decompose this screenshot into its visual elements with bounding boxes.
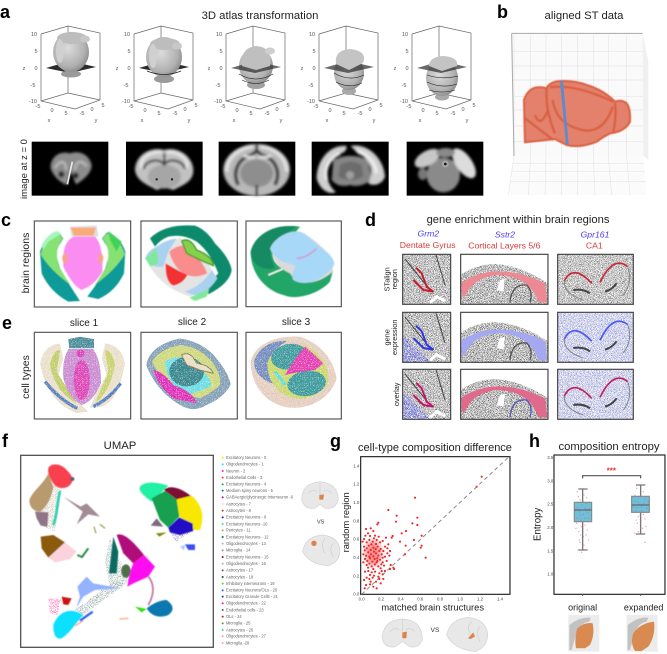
panel letter h: h: [529, 431, 540, 451]
vs label: VS: [431, 627, 440, 634]
UMAP clusters: [29, 464, 202, 639]
3D plot 2: x: [141, 118, 144, 124]
d tile: Dentate Gyrus STalign: [403, 254, 451, 304]
3D plot 5: y: [466, 118, 469, 124]
x tick labels: 0.2: [378, 596, 385, 601]
axis label: cell types: cell types: [20, 355, 32, 399]
vs label: VS: [317, 520, 325, 526]
MRI slice 5: [407, 142, 483, 196]
panel d: gene enrichment: [382, 229, 633, 419]
3D plot 1: z: [23, 66, 26, 72]
scatter points: [363, 477, 482, 588]
3D plot 1: 5: [101, 103, 105, 109]
3D plot 5: z: [394, 66, 397, 72]
3D plot 2: 10: [124, 32, 130, 38]
gene header Sstr2: Cortical Layers 5/6: [468, 241, 541, 251]
3D plot 4: y: [373, 118, 376, 124]
3D plot 3: -5: [216, 83, 220, 89]
heading: aligned ST data: aligned ST data: [545, 10, 624, 22]
d tile: CA1 expression: [558, 312, 633, 362]
heading: UMAP: UMAP: [104, 440, 136, 452]
cell types slice 3: [246, 332, 341, 419]
3D plot 4: 5: [342, 111, 346, 117]
3D plot 4: 5: [312, 49, 316, 55]
icon: coronal brain with target region: [302, 482, 338, 509]
cell types slice 1: [34, 332, 131, 419]
3D plot 2: -5: [129, 104, 133, 110]
y tick labels: 0.6: [353, 537, 360, 542]
y tick labels: 1.4: [353, 464, 360, 469]
panel h: entropy boxplot: [532, 455, 665, 652]
UMAP legend: Astrocytes - 8: [226, 508, 252, 513]
UMAP legend: Astrocytes - 18: [226, 574, 254, 579]
3D plot 5: -5: [407, 104, 411, 110]
panel e: cell-type maps: [34, 332, 237, 419]
3D plot 2: z: [116, 66, 119, 72]
slice heading 3: slice 3: [282, 317, 311, 328]
x tick labels: 0.6: [417, 596, 424, 601]
3D plot 4: 0: [312, 66, 316, 72]
panel letter e: e: [2, 313, 12, 333]
3D plot 4: 0: [368, 107, 372, 113]
3D plot 2: 5: [127, 49, 131, 55]
heading: composition entropy: composition entropy: [558, 441, 660, 453]
heading: 3D atlas transformation: 3D atlas transformation: [202, 10, 318, 22]
y tick labels: 1.2: [353, 482, 360, 487]
UMAP legend: Astrocytes - 26: [226, 627, 254, 632]
y tick labels: 1.5: [547, 548, 554, 553]
x tick labels: 1.2: [477, 596, 484, 601]
3D grid box: [508, 33, 648, 195]
gene header Gpr161: Gpr161: [581, 230, 610, 240]
UMAP legend: Astrocytes - 7: [226, 501, 252, 506]
y axis label: Entropy: [532, 508, 543, 541]
d tile: Cortical Layers overlay: [461, 369, 548, 419]
3D plot 4: 5: [379, 103, 383, 109]
row label overlay: overlay: [392, 382, 401, 406]
heading: cell-type composition difference: cell-type composition difference: [358, 442, 512, 454]
x tick labels: 0.0: [359, 596, 365, 601]
brain regions slice 1: [34, 221, 131, 307]
d tile: Cortical Layers STalign: [461, 254, 548, 304]
3D plot 3: 5: [249, 111, 253, 117]
brain regions slice 3: [246, 221, 341, 307]
MRI slice 3: [219, 142, 295, 196]
UMAP legend: Excitatory Neurons/OLs - 20: [226, 588, 278, 593]
image: original region: [568, 615, 599, 652]
3D plot 1: 5: [34, 49, 38, 55]
UMAP legend: Excitatory Neurons - 4: [226, 482, 267, 487]
axis label: brain regions: brain regions: [20, 233, 32, 293]
3D plot 5: -5: [402, 83, 406, 89]
panel letter b: b: [497, 2, 508, 22]
icon: sagittal brain with random region: [303, 535, 340, 566]
inner brain structures: [525, 87, 616, 140]
UMAP frame: [21, 455, 213, 647]
3D plot 4: -10: [307, 99, 315, 105]
3D plot 1: 0: [50, 108, 54, 114]
3D plot 3: -10: [214, 99, 222, 105]
3D plot 5: 5: [435, 111, 439, 117]
3D plot 5: 5: [405, 49, 409, 55]
3D plot 3: [208, 26, 290, 124]
x tick labels: [359, 596, 504, 601]
x tick labels: 0.4: [398, 596, 404, 601]
gene header Sstr2: [468, 229, 541, 251]
gene header Gpr161: CA1: [586, 241, 603, 251]
scatter density: [365, 541, 381, 566]
panel a: 3D atlas plots: [23, 26, 476, 124]
3D plot 2: -5: [173, 111, 177, 117]
panel b: 3D aligned ST data: [508, 33, 648, 195]
3D plot 1: x: [48, 118, 51, 124]
gene header Grm2: Dentate Gyrus: [400, 240, 456, 250]
x tick labels: 0.8: [437, 596, 444, 601]
row label gene expression: expression: [390, 320, 399, 355]
3D plot 1: 10: [31, 32, 37, 38]
3D plot 1: 0: [34, 66, 38, 72]
MRI slices 1 to 3: [32, 142, 295, 196]
UMAP legend: Pericytes - 11: [226, 528, 251, 533]
3D plot 2: 0: [127, 66, 131, 72]
UMAP legend: Excitatory Neurons - 15: [226, 554, 269, 559]
d tile: CA1 overlay: [558, 369, 633, 419]
UMAP legend: Excitatory Neurons - 12: [226, 534, 269, 539]
MRI slice 2: [126, 142, 203, 196]
icon: coronal brain comparison: [382, 619, 422, 647]
3D plot 4: -5: [309, 83, 313, 89]
3D plot 5: [394, 26, 476, 124]
3D plot 4: -5: [358, 111, 362, 117]
3D plot 3: 5: [286, 103, 290, 109]
panel letter a: a: [0, 2, 11, 22]
3D plot 4: z: [301, 66, 304, 72]
panel letter g: g: [330, 431, 341, 451]
UMAP legend: Oligodendrocytes - 1: [226, 462, 264, 467]
3D plot 4: 10: [309, 32, 315, 38]
y tick labels: 3.5: [547, 455, 554, 460]
3D plot 5: 10: [402, 32, 408, 38]
MRI slice 1: [32, 142, 108, 196]
3D plot 5: 5: [472, 103, 476, 109]
diagonal reference line: [362, 457, 508, 594]
3D plot 2: -5: [124, 83, 128, 89]
panel f: UMAP: [21, 455, 340, 647]
UMAP legend: Neuron - 2: [226, 468, 246, 473]
3D plot 5: 0: [405, 66, 409, 72]
3D plot 4: x: [326, 118, 329, 124]
y tick labels: 1.0: [547, 572, 554, 577]
3D plot 2: y: [188, 118, 191, 124]
3D plot 3: 0: [219, 66, 223, 72]
y tick labels: 0.8: [353, 518, 360, 523]
3D plot 5: -10: [400, 99, 408, 105]
3D plot 1: 0: [90, 107, 94, 113]
3D plot 4: [301, 26, 383, 124]
image: expanded region: [627, 615, 658, 652]
3D plot 3: 10: [216, 32, 222, 38]
UMAP legend: Oligodendrocytes - 13: [226, 541, 267, 546]
y tick labels: 2.5: [547, 502, 554, 507]
3D plot 5: 0: [461, 107, 465, 113]
aligned slice: [560, 81, 569, 144]
y tick labels: 0.2: [353, 573, 360, 578]
d tile: Cortical Layers expression: [461, 312, 548, 362]
d tile: CA1 STalign: [558, 254, 633, 304]
y tick labels: [353, 464, 360, 597]
UMAP legend: Inhibitory interneurons - 19: [226, 581, 275, 586]
d tile: Dentate Gyrus overlay: [403, 369, 451, 419]
x tick marks: [583, 594, 641, 596]
y axis label: random region: [341, 492, 351, 552]
3D plot 2: 5: [157, 111, 161, 117]
significance bracket: [583, 476, 641, 478]
y tick labels: 0.0: [353, 592, 360, 597]
3D plot 5: -5: [451, 111, 455, 117]
y tick labels: 1.0: [353, 500, 360, 505]
row label STalign region: STalign: [382, 267, 391, 291]
UMAP legend: Microglia - 25: [226, 621, 251, 626]
UMAP legend: Endothelial cells - 23: [226, 607, 264, 612]
UMAP legend: Excitatory Granule Cells - 21: [226, 594, 279, 599]
panel c: brain region maps: [34, 221, 237, 307]
3D plot 1: [23, 26, 105, 124]
3D plot 3: 0: [235, 108, 239, 114]
MRI slices 4 and 5: [312, 142, 483, 196]
UMAP legend: Endothelial Cells - 3: [226, 475, 263, 480]
category label original: original: [568, 602, 597, 612]
3D plot 5: 0: [421, 108, 425, 114]
y tick labels: 3.0: [547, 478, 554, 483]
3D plot 1: y: [95, 118, 98, 124]
3D plot 4: -5: [314, 104, 318, 110]
cell types slice 2: [141, 332, 237, 419]
3D plot 1: -5: [80, 111, 84, 117]
category label expanded: expanded: [624, 602, 663, 612]
plot frame: [554, 455, 665, 594]
UMAP legend: Medium spiny neurons - 5: [226, 488, 274, 493]
3D plot 2: [116, 26, 198, 124]
panel g: scatter plot: [341, 457, 510, 652]
scatter frame: [361, 457, 510, 594]
UMAP legend: GABAergic/glycinergic interneuron -6: [226, 495, 294, 500]
panel letter d: d: [365, 210, 376, 230]
heading: gene enrichment within brain regions: gene enrichment within brain regions: [427, 214, 610, 226]
panel letter c: c: [1, 210, 11, 230]
3D plot 3: y: [280, 118, 283, 124]
box original: [574, 489, 592, 552]
3D plot 2: 5: [194, 103, 198, 109]
3D plot 1: -5: [36, 104, 40, 110]
3D plot 1: 5: [64, 111, 68, 117]
3D plot 3: -5: [221, 104, 225, 110]
gene header Sstr2: Sstr2: [495, 229, 515, 239]
axis label: image at z = 0: image at z = 0: [19, 139, 30, 199]
gene header Grm2: [400, 229, 456, 250]
3D plot 3: z: [208, 66, 211, 72]
UMAP legend: Astrocytes - 17: [226, 568, 254, 573]
brain regions slice 2: [141, 221, 237, 307]
slice heading 2: slice 2: [178, 317, 207, 328]
gene header Grm2: Grm2: [418, 229, 439, 239]
3D plot 1: -5: [31, 83, 35, 89]
3D plot 2: 0: [183, 107, 187, 113]
UMAP legend: [222, 455, 294, 645]
MRI slice 4: [312, 142, 389, 196]
y tick labels: 0.4: [353, 555, 360, 560]
icon: sagittal brain comparison: [447, 617, 488, 652]
3D plot 3: 5: [219, 49, 223, 55]
3D plot 4: 0: [328, 108, 332, 114]
3D plot 3: x: [233, 118, 236, 124]
UMAP legend: Microglia - 14: [226, 548, 251, 553]
UMAP legend: Oligodendrocytes - 27: [226, 634, 267, 639]
UMAP legend: Oligodendrocytes - 22: [226, 601, 267, 606]
UMAP legend: Excitatory Neurons - 9: [226, 515, 267, 520]
gene header Gpr161: [581, 230, 610, 251]
y tick labels: 2.0: [547, 525, 554, 530]
x tick labels: 1.0: [457, 596, 464, 601]
box expanded: [632, 485, 649, 542]
UMAP legend: Excitatory Neurons -10: [226, 521, 268, 526]
slice heading 1: slice 1: [70, 318, 99, 329]
3D plot 1: -10: [29, 99, 37, 105]
y tick labels: [547, 455, 554, 577]
3D plot 2: 0: [143, 108, 147, 114]
3D plot 5: x: [419, 118, 422, 124]
row label gene expression: gene: [382, 329, 391, 345]
3D plot 3: -5: [265, 111, 269, 117]
significance stars: ***: [607, 467, 617, 476]
3D plot 2: -10: [122, 99, 130, 105]
x tick labels: 1.4: [497, 596, 504, 601]
UMAP legend: Microglia -28: [226, 640, 250, 645]
panel letter f: f: [2, 431, 9, 451]
UMAP legend: OLs - 24: [226, 614, 242, 619]
3D plot 3: 0: [275, 107, 279, 113]
x axis label: matched brain structures: [381, 603, 484, 613]
ST brain volume: [524, 81, 630, 146]
UMAP legend: Oligodendrocytes - 16: [226, 561, 267, 566]
row label STalign region: region: [390, 269, 399, 290]
UMAP legend: Excitatory Neurons - 0: [226, 455, 267, 460]
d tile: Dentate Gyrus expression: [403, 312, 451, 362]
